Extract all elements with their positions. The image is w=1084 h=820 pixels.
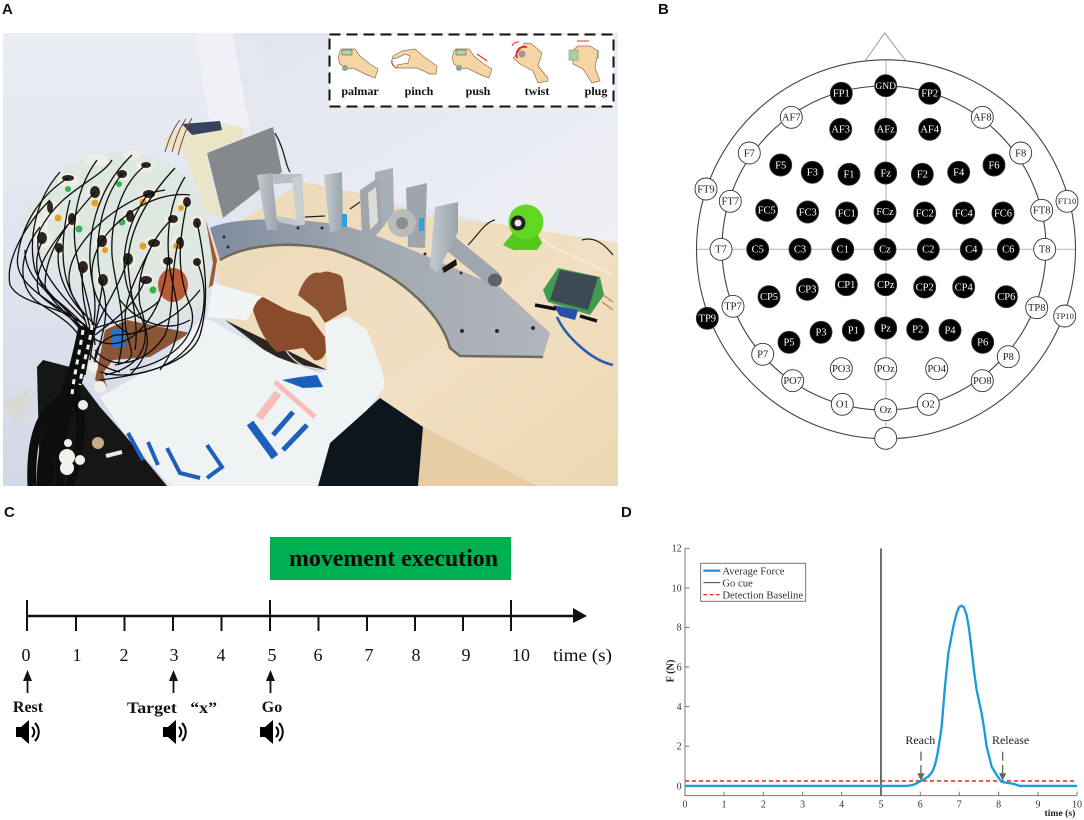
time tick labels: 8 bbox=[412, 645, 420, 665]
ear bbox=[158, 268, 188, 302]
time tick labels: 0 bbox=[22, 645, 30, 665]
filled recording electrodes: CP5 bbox=[760, 292, 778, 303]
cue labels: Go bbox=[262, 699, 282, 716]
x axis numbers: 9 bbox=[1035, 800, 1040, 811]
time axis with arrow bbox=[27, 600, 587, 631]
panel C: trial timeline bbox=[13, 537, 612, 744]
filled recording electrodes: CP3 bbox=[798, 285, 816, 296]
filled recording electrodes: F6 bbox=[988, 160, 1000, 171]
green robot camera bbox=[503, 204, 544, 250]
x axis numbers bbox=[682, 800, 1082, 811]
average force curve bbox=[685, 606, 1077, 786]
x axis numbers: 3 bbox=[800, 800, 805, 811]
open electrodes: O2 bbox=[922, 400, 935, 411]
open electrodes: PO4 bbox=[927, 364, 947, 375]
module and cables bbox=[468, 220, 613, 365]
grasp devices bbox=[257, 168, 502, 286]
axes and ticks bbox=[685, 548, 1077, 796]
time tick labels: 2 bbox=[120, 645, 128, 665]
open electrodes: AF7 bbox=[782, 113, 801, 124]
time tick labels: 4 bbox=[216, 645, 226, 665]
open electrodes: FT8 bbox=[1033, 206, 1050, 217]
filled recording electrodes: P4 bbox=[944, 326, 956, 337]
time tick labels: 3 bbox=[170, 645, 178, 665]
panel D: average force line chart bbox=[665, 544, 1082, 819]
reach annotation: Reach bbox=[905, 733, 935, 747]
wire bundle and hanging electrodes bbox=[32, 325, 122, 486]
open electrodes: P8 bbox=[1003, 352, 1014, 363]
y axis numbers: 8 bbox=[677, 623, 682, 634]
filled recording electrodes: C4 bbox=[965, 245, 978, 256]
filled recording electrodes: FC4 bbox=[955, 208, 973, 219]
icon: speaker at go bbox=[260, 720, 283, 744]
reach annotation bbox=[905, 733, 935, 781]
panel label B: B bbox=[658, 1, 669, 18]
open electrodes: FT10 bbox=[1058, 196, 1076, 206]
y axis numbers: 0 bbox=[677, 781, 682, 792]
legend: Go cue bbox=[722, 578, 753, 589]
y axis title: F (N) bbox=[665, 660, 676, 682]
open electrodes: O1 bbox=[836, 400, 849, 411]
subject: chair, shirt, arms and hands bbox=[37, 217, 385, 486]
filled recording electrodes: FC6 bbox=[994, 208, 1012, 219]
filled recording electrodes: F3 bbox=[807, 168, 818, 179]
icon: twist hand bbox=[512, 42, 548, 83]
filled recording electrodes: FP1 bbox=[833, 89, 850, 100]
time tick labels: 9 bbox=[462, 645, 470, 665]
time tick labels: 10 bbox=[512, 645, 530, 665]
filled recording electrodes: FC2 bbox=[916, 208, 934, 219]
filled recording electrodes: CP1 bbox=[837, 280, 855, 291]
y axis numbers: 6 bbox=[677, 662, 682, 673]
cue labels: Target “x” bbox=[127, 700, 217, 717]
time tick labels: 5 bbox=[268, 645, 276, 665]
filled recording electrodes bbox=[696, 75, 1019, 353]
filled recording electrodes: Cz bbox=[879, 245, 891, 256]
gesture labels bbox=[341, 84, 607, 98]
filled recording electrodes: F4 bbox=[953, 168, 965, 179]
panel label D: D bbox=[621, 504, 632, 521]
filled recording electrodes: C3 bbox=[794, 245, 806, 256]
legend bbox=[701, 563, 806, 601]
detection baseline bbox=[685, 778, 1077, 783]
metal arc plate bbox=[210, 219, 550, 357]
icon: pinch hand bbox=[392, 49, 437, 74]
filled recording electrodes: CP4 bbox=[955, 282, 973, 293]
power outlet bbox=[3, 390, 33, 423]
filled recording electrodes: C2 bbox=[922, 245, 934, 256]
icon: push hand bbox=[452, 49, 492, 78]
gesture labels: plug bbox=[585, 84, 607, 98]
panel label C: C bbox=[4, 504, 15, 521]
open electrodes: AF8 bbox=[973, 113, 992, 124]
open electrodes: F7 bbox=[744, 148, 755, 159]
y axis numbers bbox=[672, 544, 682, 792]
y axis numbers: 10 bbox=[672, 583, 682, 594]
filled recording electrodes: P6 bbox=[977, 338, 988, 349]
filled recording electrodes: F2 bbox=[917, 170, 928, 181]
open electrodes: PO8 bbox=[973, 376, 992, 387]
time tick labels: time (s) bbox=[553, 645, 612, 666]
open electrodes: POz bbox=[877, 364, 895, 375]
movement execution bar bbox=[270, 537, 511, 580]
head outline and reference lines bbox=[696, 33, 1076, 439]
gesture labels: pinch bbox=[405, 84, 434, 98]
filled recording electrodes: CP6 bbox=[997, 292, 1015, 303]
filled recording electrodes: FC1 bbox=[838, 208, 856, 219]
filled recording electrodes: C5 bbox=[752, 245, 764, 256]
filled recording electrodes: TP9 bbox=[699, 314, 716, 325]
open electrodes: TP7 bbox=[724, 302, 742, 313]
release annotation: Release bbox=[992, 733, 1029, 747]
open electrodes bbox=[695, 106, 1078, 449]
filled recording electrodes: FCz bbox=[876, 207, 894, 218]
filled recording electrodes: P2 bbox=[912, 325, 923, 336]
open electrodes: Oz bbox=[880, 405, 892, 416]
x axis numbers: 7 bbox=[957, 800, 962, 811]
gesture labels: palmar bbox=[341, 84, 379, 98]
wall background bbox=[3, 33, 618, 486]
time tick labels: 7 bbox=[364, 645, 374, 665]
filled recording electrodes: C1 bbox=[837, 245, 849, 256]
gesture inset: five grasp types bbox=[330, 34, 614, 106]
panel B: EEG electrode head map bbox=[695, 33, 1078, 449]
gesture labels: twist bbox=[525, 84, 549, 98]
event arrows bbox=[23, 670, 275, 693]
legend: Detection Baseline bbox=[722, 590, 803, 601]
filled recording electrodes: P1 bbox=[848, 326, 859, 337]
neck tag bbox=[112, 329, 125, 348]
filled recording electrodes: P3 bbox=[815, 328, 827, 339]
open electrodes: F8 bbox=[1015, 148, 1026, 159]
movement execution bar: movement execution bbox=[289, 546, 498, 572]
open electrodes: FT9 bbox=[697, 184, 715, 195]
open electrodes: TP8 bbox=[1028, 303, 1045, 314]
plate inner rim bbox=[220, 245, 543, 357]
icon: palmar hand bbox=[338, 49, 378, 78]
wooden table and drawer bbox=[210, 182, 618, 486]
legend: Average Force bbox=[722, 566, 785, 577]
tangled electrode wires bbox=[9, 155, 206, 380]
filled recording electrodes: AFz bbox=[877, 125, 895, 136]
open electrodes: TP10 bbox=[1055, 311, 1074, 321]
cap electrodes bbox=[32, 150, 203, 294]
open electrodes: T8 bbox=[1039, 245, 1051, 256]
y axis numbers: 4 bbox=[677, 702, 682, 713]
open electrodes: T7 bbox=[715, 245, 727, 256]
open electrodes: P7 bbox=[757, 350, 768, 361]
time tick labels bbox=[22, 645, 612, 666]
cue labels bbox=[13, 699, 282, 717]
filled recording electrodes: F5 bbox=[775, 160, 786, 171]
filled recording electrodes: P5 bbox=[783, 338, 795, 349]
filled recording electrodes: Fz bbox=[880, 168, 891, 179]
filled recording electrodes: Pz bbox=[880, 323, 891, 334]
icon: speaker at target bbox=[163, 720, 186, 744]
icon: speaker at rest bbox=[16, 720, 39, 744]
y axis numbers: 2 bbox=[677, 742, 682, 753]
open electrodes: FT7 bbox=[722, 197, 739, 208]
filled recording electrodes: FP2 bbox=[921, 89, 938, 100]
x axis numbers: 4 bbox=[839, 800, 844, 811]
filled recording electrodes: AF3 bbox=[831, 125, 850, 136]
inset background and dashed frame bbox=[330, 34, 614, 106]
x axis numbers: 0 bbox=[682, 800, 687, 811]
panel A: photo of subject wearing EEG cap at the grasp apparatus bbox=[3, 33, 618, 486]
cue labels: Rest bbox=[13, 699, 44, 716]
amplifier box bbox=[163, 118, 290, 218]
time tick labels: 1 bbox=[72, 645, 82, 665]
x axis numbers: 8 bbox=[996, 800, 1001, 811]
plate bolt holes bbox=[222, 226, 535, 333]
filled recording electrodes: C6 bbox=[1002, 245, 1014, 256]
open electrodes: PO7 bbox=[783, 376, 802, 387]
icon: plug hand bbox=[569, 41, 600, 83]
time tick labels: 6 bbox=[314, 645, 322, 665]
filled recording electrodes: CPz bbox=[877, 280, 895, 291]
x axis numbers: 5 bbox=[878, 800, 883, 811]
go cue line bbox=[878, 548, 883, 796]
filled recording electrodes: F1 bbox=[843, 170, 855, 181]
filled recording electrodes: CP2 bbox=[916, 282, 934, 293]
release annotation bbox=[992, 733, 1029, 781]
EEG cap bbox=[23, 153, 213, 322]
open electrodes: PO3 bbox=[832, 364, 851, 375]
filled recording electrodes: FC3 bbox=[799, 207, 817, 218]
panel label A: A bbox=[2, 1, 13, 18]
filled recording electrodes: GND bbox=[875, 82, 896, 92]
x axis numbers: 10 bbox=[1072, 800, 1082, 811]
y axis numbers: 12 bbox=[672, 544, 682, 555]
x axis title: time (s) bbox=[1045, 808, 1075, 819]
filled recording electrodes: FC5 bbox=[758, 206, 776, 217]
x axis numbers: 2 bbox=[761, 800, 766, 811]
gesture labels: push bbox=[466, 84, 491, 98]
filled recording electrodes: AF4 bbox=[920, 125, 940, 136]
x axis numbers: 6 bbox=[918, 800, 923, 811]
x axis numbers: 1 bbox=[721, 800, 726, 811]
